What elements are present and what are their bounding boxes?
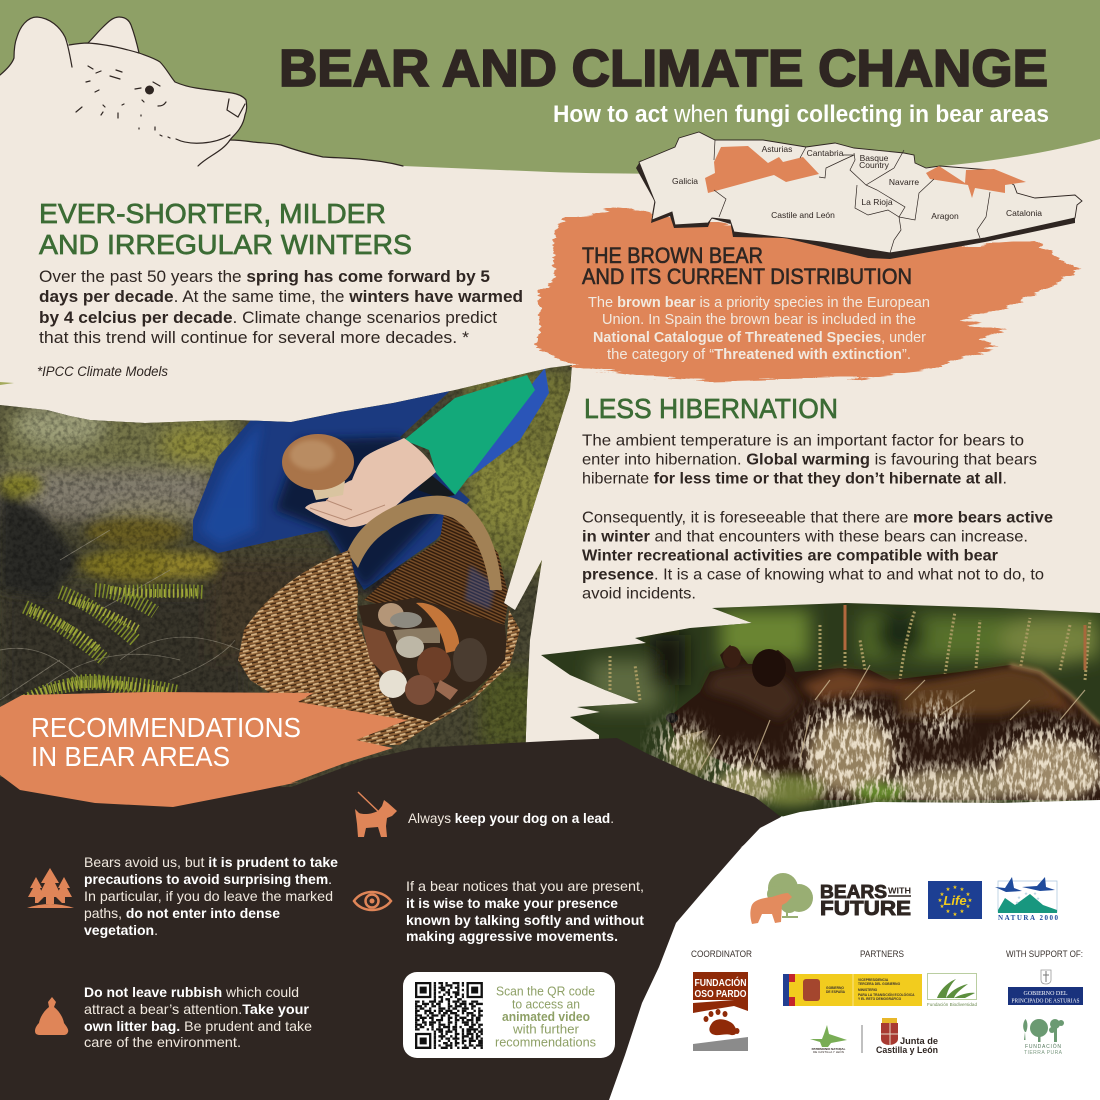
heading: recommendations: RECOMMENDATIONS bbox=[31, 712, 301, 743]
basket front wall bbox=[238, 550, 520, 745]
orange brush: recommendations heading bbox=[0, 692, 407, 807]
logo: Gobierno de España: MINISTERIO bbox=[858, 988, 878, 992]
logo: EU Life bbox=[928, 881, 982, 919]
text block: brown bear: Union. In Spain the brown bear is included in the bbox=[602, 312, 916, 328]
logo: Gobierno de España bbox=[783, 974, 922, 1006]
text: make your presence known: it is wise to make your presence bbox=[406, 895, 618, 911]
logo: Fundación Biodiversidad: Fundación Biodiversidad bbox=[927, 1002, 977, 1008]
text block: brown bear bbox=[588, 295, 930, 363]
text: avoid surprising bears bbox=[84, 854, 338, 938]
text: avoid surprising bears: Bears avoid us, but it is prudent to take bbox=[84, 854, 338, 870]
logo: Bears with Future: WITH bbox=[888, 886, 911, 896]
section labels: WITH SUPPORT OF: bbox=[1006, 949, 1083, 959]
logo: EU Life: ★ bbox=[960, 886, 965, 893]
logo: Gobierno de España: Y EL RETO DEMOGRÁFICO bbox=[858, 996, 902, 1001]
text: avoid surprising bears: paths, do not enter into dense bbox=[84, 905, 280, 921]
logo: Natura 2000: ★ bbox=[1024, 891, 1029, 896]
text block: hibernation: presence. It is a case of knowing what to and what not to do, to bbox=[582, 566, 1044, 584]
text block: winters: that this trend will continue for several more decades. * bbox=[39, 328, 469, 347]
QR caption: with further bbox=[512, 1022, 580, 1036]
white logo area bbox=[600, 800, 1100, 1100]
bear body bbox=[668, 645, 1100, 800]
mushroom bbox=[312, 481, 345, 500]
logo: Gobierno de España: VICEPRESIDENCIA bbox=[858, 978, 889, 982]
mushrooms in the basket bbox=[362, 603, 487, 705]
text block: hibernation: The ambient temperature is an important factor for bears to bbox=[582, 432, 1024, 450]
logo: EU Life: ★ bbox=[940, 891, 945, 898]
region labels: Catalonia bbox=[1006, 208, 1042, 218]
logo: Junta de Castilla y León: Castilla y León bbox=[876, 1045, 938, 1056]
logo: Fundación Tierra Pura: FUNDACIÓN bbox=[1025, 1043, 1061, 1050]
text: rubbish bbox=[84, 984, 312, 1050]
logo: Patrimonio Natural bbox=[810, 1025, 862, 1054]
logo: EU Life: ★ bbox=[953, 884, 958, 891]
grass wisps background bbox=[610, 605, 1090, 700]
text block: hibernation: Consequently, it is foreseeable that there are more bears active bbox=[582, 510, 1053, 526]
title: BEAR AND CLIMATE CHANGE bbox=[279, 40, 1048, 98]
bear distribution area west bbox=[705, 146, 819, 193]
orange brush panel bbox=[537, 209, 1081, 381]
photo: person collecting mushrooms in a forest bbox=[0, 360, 580, 810]
logo: Patrimonio Natural: PATRIMONIO NATURAL bbox=[812, 1047, 846, 1051]
logo: EU Life: ★ bbox=[938, 897, 943, 904]
text: dog: Always keep your dog on a lead. bbox=[408, 810, 614, 826]
QR caption bbox=[495, 984, 596, 1050]
logo: Gobierno de España: TERCERA DEL GOBIERNO bbox=[858, 982, 901, 986]
jeans bbox=[193, 390, 470, 590]
logo: Natura 2000: ★ bbox=[1036, 896, 1041, 901]
logo: EU Life: ★ bbox=[966, 903, 971, 910]
text block: hibernation: in winter and that encounters with these bears can increase. bbox=[582, 528, 1028, 546]
dark recommendations panel bbox=[0, 738, 781, 1100]
hand bbox=[305, 438, 436, 527]
heading: winters: EVER-SHORTER, MILDER bbox=[39, 198, 386, 229]
photo: brown bear in tall grass bbox=[530, 600, 1100, 830]
logo: EU Life: ★ bbox=[946, 886, 951, 893]
region labels: Cantabria bbox=[807, 148, 844, 158]
logo: EU Life: Life bbox=[943, 893, 967, 908]
section labels bbox=[691, 949, 1083, 959]
text block: hibernation: Winter recreational activities are compatible with bear bbox=[582, 548, 998, 564]
icon: dog on a lead bbox=[355, 792, 397, 837]
logo: Bears with Future: BEARS bbox=[820, 882, 887, 902]
text: rubbish: care of the environment. bbox=[84, 1034, 241, 1050]
heading: recommendations bbox=[31, 712, 301, 772]
basket back wall bbox=[364, 515, 508, 625]
foreground grass bbox=[668, 717, 1100, 806]
heading: less hibernation: LESS HIBERNATION bbox=[584, 393, 838, 424]
text: rubbish: attract a bear’s attention. Take your bbox=[84, 1001, 310, 1017]
text block: winters bbox=[39, 267, 523, 347]
logo: Junta de Castilla y León: Junta de bbox=[900, 1036, 938, 1047]
heading: winters bbox=[39, 198, 412, 260]
basket interior bbox=[358, 598, 508, 722]
bear eye bbox=[145, 86, 154, 94]
small green speck bbox=[0, 382, 14, 385]
QR caption: animated video bbox=[502, 1009, 590, 1024]
region borders bbox=[714, 140, 990, 253]
icon: litter bag bbox=[35, 997, 68, 1035]
logo: Fundación Tierra Pura bbox=[1023, 1019, 1064, 1056]
map land bbox=[639, 132, 1082, 253]
text: make your presence known: If a bear notices that you are present, bbox=[406, 878, 644, 894]
basket handle bbox=[347, 496, 502, 590]
heading: recommendations: IN BEAR AREAS bbox=[31, 741, 230, 772]
white brush streaks bbox=[740, 816, 790, 848]
logo: Natura 2000: ★ bbox=[1015, 900, 1020, 905]
QR caption: recommendations bbox=[495, 1034, 596, 1050]
logo: Patrimonio Natural: DE CASTILLA Y LEÓN bbox=[813, 1049, 844, 1054]
map shadow bbox=[636, 160, 1075, 259]
text: rubbish: Do not leave rubbish which could bbox=[84, 984, 299, 1000]
region labels: Asturias bbox=[762, 144, 792, 154]
text block: hibernation bbox=[582, 432, 1053, 602]
QR card bbox=[403, 972, 615, 1058]
heading: winters: AND IRREGULAR WINTERS bbox=[39, 229, 412, 260]
logo: Fundación Biodiversidad bbox=[927, 974, 977, 1008]
region labels: La Rioja bbox=[861, 197, 893, 207]
logo: Bears with Future bbox=[750, 873, 911, 924]
logo: Fundación Oso Pardo: FUNDACIÓN bbox=[694, 976, 746, 989]
region labels: Castile and León bbox=[771, 210, 835, 220]
logo: Gobierno de España: PARA LA TRANSICIÓN ECOLÓGICA bbox=[858, 992, 915, 997]
green header band bbox=[0, 0, 1100, 174]
text: avoid surprising bears: In particular, if you do leave the marked bbox=[84, 888, 333, 904]
logo: Fundación Tierra Pura: TIERRA PURA bbox=[1024, 1050, 1063, 1056]
text block: winters: by 4 celcius per decade. Climate change scenarios predict bbox=[39, 308, 497, 327]
logo: Natura 2000: NATURA 2000 bbox=[998, 914, 1058, 922]
logo: Natura 2000: ★ bbox=[1017, 895, 1022, 900]
icon: eye bbox=[354, 892, 391, 910]
text: avoid surprising bears: precautions to avoid surprising them. bbox=[84, 871, 332, 887]
logo: EU Life: ★ bbox=[960, 908, 965, 915]
logo: EU Life: ★ bbox=[966, 891, 971, 898]
bear distribution area east bbox=[926, 166, 1026, 198]
logo: Principado de Asturias: GOBIERNO DEL bbox=[1024, 990, 1068, 997]
logo: Fundación Oso Pardo: OSO PARDO bbox=[694, 988, 746, 1000]
ferns bbox=[20, 590, 205, 705]
text: rubbish: own litter bag. Be prudent and take bbox=[84, 1018, 312, 1034]
subtitle: How to act when fungi collecting in bear areas bbox=[553, 101, 1049, 128]
heading: brown bear: THE BROWN BEAR bbox=[582, 243, 763, 268]
region labels: Galicia bbox=[672, 176, 698, 186]
logo: Gobierno de España: DE ESPAÑA bbox=[826, 989, 846, 994]
region labels: Basque bbox=[860, 153, 889, 163]
region labels bbox=[672, 144, 1042, 221]
twigs bbox=[0, 530, 240, 700]
icon: trees bbox=[27, 868, 74, 908]
text: make your presence known: known by talking softly and without bbox=[406, 912, 644, 928]
heading: brown bear bbox=[582, 243, 912, 289]
text block: hibernation: hibernate for less time or that they don’t hibernate at all. bbox=[582, 470, 1007, 488]
QR caption: to access an bbox=[512, 996, 580, 1012]
QR code bbox=[415, 982, 483, 1049]
logo: Principado de Asturias bbox=[1008, 970, 1083, 1005]
text: avoid surprising bears: vegetation. bbox=[84, 922, 158, 938]
logo: Natura 2000: ★ bbox=[1033, 891, 1038, 896]
logo: EU Life: ★ bbox=[968, 897, 973, 904]
text block: winters: days per decade. At the same time, the winters have warmed bbox=[39, 287, 523, 306]
logo: Fundación Oso Pardo bbox=[693, 972, 748, 1051]
illustration: bear head outline bbox=[0, 17, 403, 166]
text block: hibernation: enter into hibernation. Global warming is favouring that bears bbox=[582, 452, 1037, 468]
text: make your presence known: making aggressive movements. bbox=[406, 928, 618, 944]
region labels: Country bbox=[859, 160, 890, 170]
region labels: Navarre bbox=[889, 177, 919, 187]
text block: brown bear: The brown bear is a priority species in the European bbox=[588, 295, 930, 311]
logo: EU Life: ★ bbox=[953, 911, 958, 918]
map: Spanish regions and bear distribution bbox=[636, 132, 1082, 259]
text block: brown bear: National Catalogue of Threatened Species, under bbox=[593, 330, 926, 346]
logo: Gobierno de España: GOBIERNO bbox=[826, 986, 844, 990]
logo: Natura 2000 bbox=[995, 877, 1058, 922]
text: make your presence known bbox=[406, 878, 644, 944]
logo: Principado de Asturias: PRINCIPADO DE ASTURIAS bbox=[1012, 998, 1080, 1004]
footnote: *IPCC Climate Models bbox=[37, 364, 168, 379]
text block: brown bear: the category of “Threatened with extinction ”. bbox=[607, 347, 911, 363]
text block: winters: Over the past 50 years the spring has come forward by 5 bbox=[39, 267, 490, 286]
logo: EU Life: ★ bbox=[940, 903, 945, 910]
logo: EU Life: ★ bbox=[946, 908, 951, 915]
logo: Junta de Castilla y León bbox=[876, 1018, 938, 1056]
QR caption: Scan the QR code bbox=[496, 984, 595, 998]
section labels: PARTNERS bbox=[860, 949, 904, 959]
region labels: Aragon bbox=[931, 211, 959, 221]
logo: Bears with Future: FUTURE bbox=[820, 898, 911, 920]
text block: hibernation: avoid incidents. bbox=[582, 586, 696, 602]
heading: brown bear: AND ITS CURRENT DISTRIBUTION bbox=[582, 264, 912, 289]
sleeve bbox=[404, 375, 535, 495]
section labels: COORDINATOR bbox=[691, 949, 752, 959]
